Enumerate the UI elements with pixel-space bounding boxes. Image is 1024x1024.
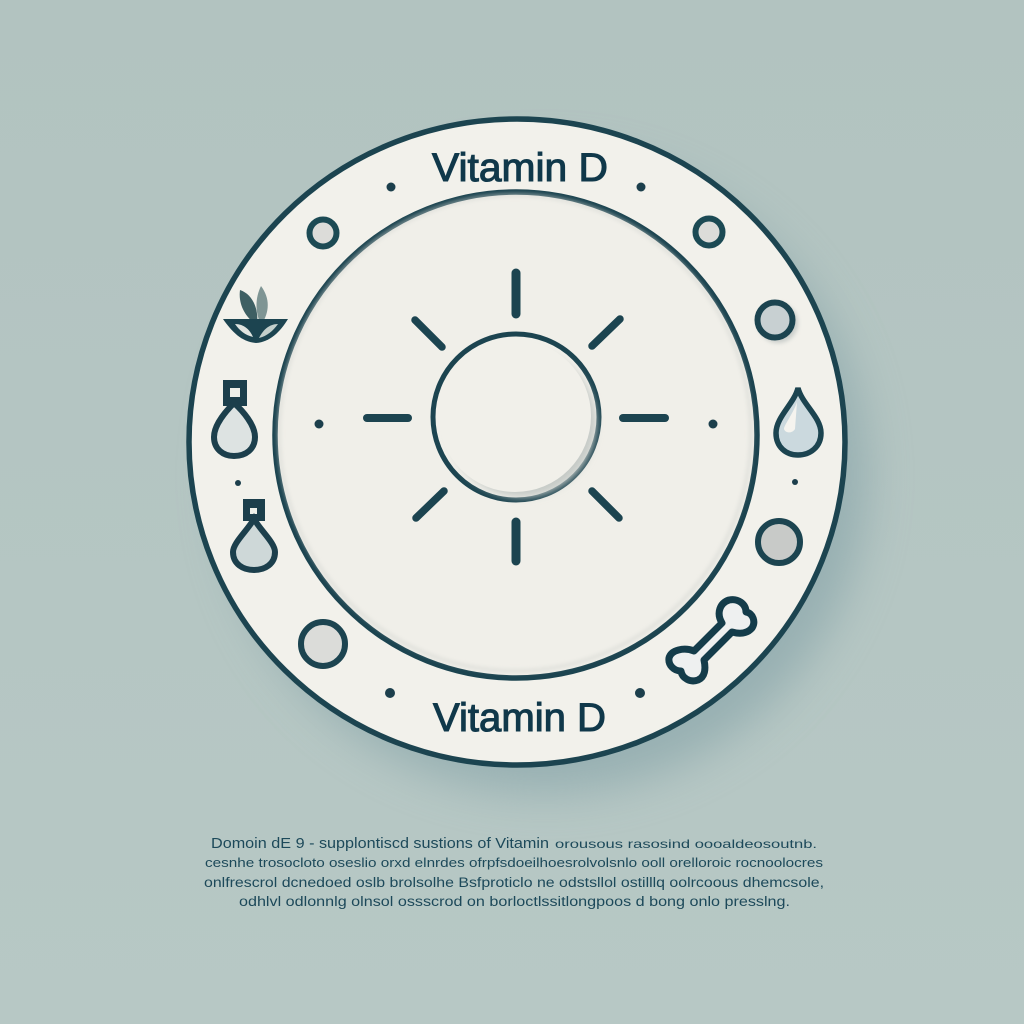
sun rays: [367, 273, 665, 561]
description line 1: orousous rasosind oooaldeosoutnb.: [555, 837, 817, 851]
sun disc: [433, 334, 599, 500]
icon: ring bottom left: [301, 622, 345, 666]
icon: sun: [367, 273, 665, 561]
panel: outer ring disc: [189, 119, 845, 765]
icon: ring top left: [310, 220, 336, 246]
icon: bottle drop upper: [214, 380, 255, 456]
description line 2: cesnhe trosocloto oseslio orxd elnrdes ofrpfsdoeilhoesrolvolsnlo ooll orelloroic rocnoolocres: [205, 855, 824, 870]
description line 4: odhlvl odlonnlg olnsol ossscrod on borloctlssitlongpoos d bong onlo presslng.: [239, 894, 790, 909]
icon: bone: [669, 600, 754, 681]
text block: description: [204, 835, 824, 909]
icon: ring right upper: [758, 302, 798, 343]
description line 1: Domoin dE 9 - supplontiscd sustions of Vitamin: [211, 835, 549, 852]
icon: bottle drop lower: [233, 499, 275, 570]
panel: inner disc: [275, 192, 757, 678]
heading: bottom label: Vitamin D: [433, 696, 606, 740]
disc drop shadow: [223, 157, 867, 793]
small dots: [235, 182, 798, 698]
icon: ring right lower: [758, 521, 800, 563]
icon: water drop right: [776, 388, 821, 455]
description line 3: onlfrescrol dcnedoed oslb brolsolhe Bsfproticlo ne odstsllol ostilllq oolrcoous dhemcsole,: [204, 875, 824, 890]
icon: ring top right: [696, 218, 722, 246]
heading: top label: Vitamin D: [432, 146, 608, 190]
icon: leaf: [223, 286, 288, 343]
description line 1: [211, 835, 817, 852]
